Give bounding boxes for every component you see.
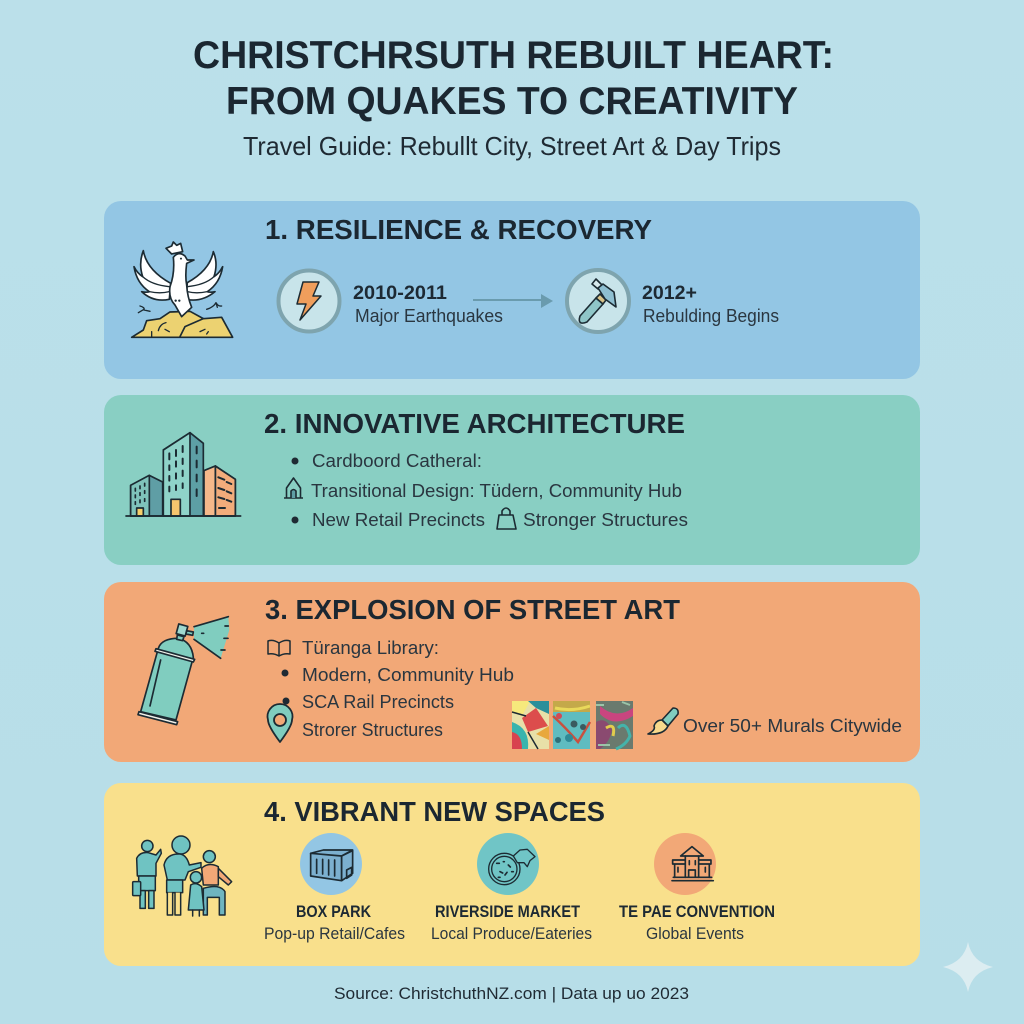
bullet list: street art: SCA Rail Precincts: [302, 691, 454, 712]
timeline event: 2012+: [642, 283, 779, 326]
bullet list: architecture: [284, 450, 688, 530]
icon: hammer in circle: [567, 270, 629, 332]
title: [193, 34, 834, 123]
bullet list: architecture: Transitional Design: Tüdern, Community Hub: [311, 480, 682, 501]
venue: riverside market: [431, 833, 592, 943]
icon: shipping container: [300, 833, 362, 895]
timeline event: 2012+: 2012+: [642, 283, 697, 304]
icon: phoenix on rubble: [132, 242, 233, 337]
timeline event: 2010-2011: [353, 283, 503, 326]
timeline event: 2010-2011: Major Earthquakes: [355, 306, 503, 326]
venue: box park: BOX PARK: [296, 903, 371, 921]
venue: box park: Pop-up Retail/Cafes: [264, 925, 405, 943]
heading: section 2: 2. INNOVATIVE ARCHITECTURE: [264, 408, 685, 439]
panel: innovative architecture: [104, 395, 920, 565]
icon: lightning in circle: [278, 270, 340, 332]
panel: resilience and recovery: [104, 201, 920, 379]
mural 1: [512, 701, 549, 749]
venue: riverside market: Local Produce/Eateries: [431, 925, 592, 943]
panel: vibrant new spaces: [104, 783, 920, 966]
icon: convention building: [654, 833, 716, 895]
title: FROM QUAKES TO CREATIVITY: [226, 80, 798, 123]
icon: sparkle: [943, 942, 993, 992]
timeline event: 2010-2011: 2010-2011: [353, 283, 447, 304]
venue: box park: [264, 833, 405, 943]
icon: market dish: [477, 833, 539, 895]
bullet list: street art: Modern, Community Hub: [302, 664, 514, 685]
icon: small house: [284, 478, 303, 498]
icon: city buildings: [126, 433, 241, 516]
panel: explosion of street art: [104, 582, 920, 762]
icon: paint brush: [648, 708, 678, 734]
arrow: [473, 294, 553, 308]
bullet list: street art: Strorer Structures: [302, 719, 443, 740]
heading: section 1: 1. RESILIENCE & RECOVERY: [265, 214, 652, 245]
mural 3: [596, 701, 633, 749]
venue: te pae convention: TE PAE CONVENTION: [619, 903, 775, 921]
heading: section 3: 3. EXPLOSION OF STREET ART: [265, 594, 680, 625]
icon: spray can: [138, 617, 229, 725]
icon: open book: [268, 640, 290, 656]
bullet list: street art: Türanga Library:: [302, 637, 439, 658]
venue: riverside market: RIVERSIDE MARKET: [435, 903, 580, 921]
venue: te pae convention: [619, 833, 775, 943]
icon: location pin: [268, 704, 292, 742]
bullet list: street art: [268, 637, 514, 742]
subtitle: Travel Guide: Rebullt City, Street Art & Day Trips: [243, 131, 781, 161]
bullet list: architecture: New Retail Precincts: [312, 509, 485, 530]
icon: shopping bag: [497, 508, 516, 529]
callout: murals count: Over 50+ Murals Citywide: [683, 715, 902, 736]
bullet list: architecture: Stronger Structures: [523, 509, 688, 530]
icon: family group: [133, 836, 232, 916]
source line: Source: ChristchuthNZ.com | Data up uo 2023: [334, 984, 689, 1003]
bullet list: architecture: Cardboord Catheral:: [312, 450, 482, 471]
title: CHRISTCHRSUTH REBUILT HEART:: [193, 34, 834, 77]
timeline event: 2012+: Rebulding Begins: [643, 306, 779, 326]
mural 2: [553, 701, 590, 749]
murals: three thumbnails: [512, 701, 633, 749]
heading: section 4: 4. VIBRANT NEW SPACES: [264, 796, 605, 827]
venue: te pae convention: Global Events: [646, 925, 744, 943]
